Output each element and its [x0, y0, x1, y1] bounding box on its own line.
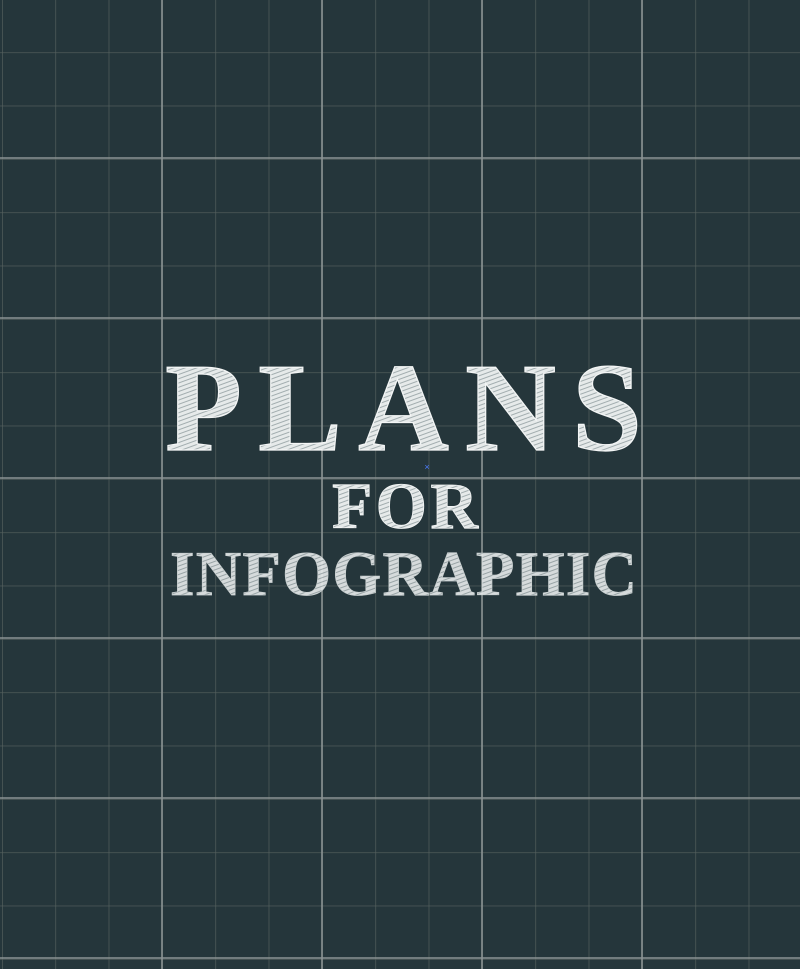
subtitle: FOR: FOR: [332, 470, 479, 543]
subtitle: INFOGRAPHIC: INFOGRAPHIC: [170, 539, 637, 609]
marker: blue cross: ×: [424, 462, 430, 472]
title: PLANS: PLANS: [165, 339, 642, 478]
